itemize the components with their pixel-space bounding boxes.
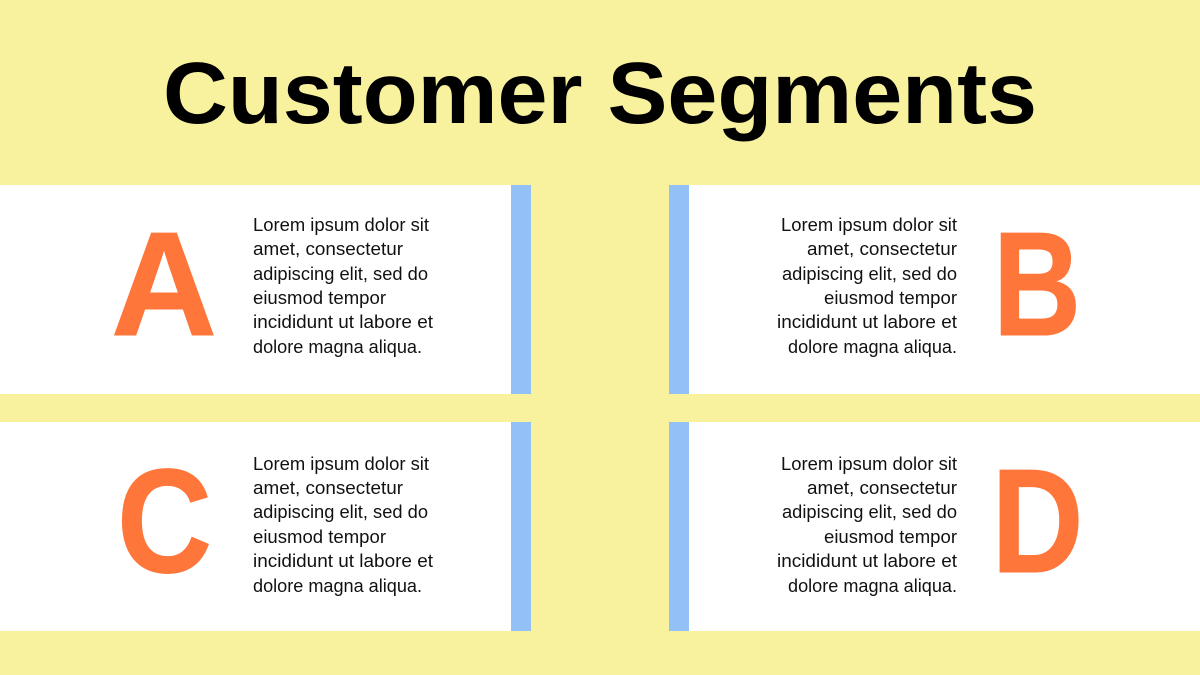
text block B: incididunt ut labore et: [777, 312, 957, 332]
text block D: adipiscing elit, sed do: [782, 502, 957, 522]
letter C: C: [117, 439, 212, 604]
letter B: B: [993, 202, 1081, 367]
text block D: amet, consectetur: [807, 478, 957, 498]
text block D: Lorem ipsum dolor sit: [781, 454, 957, 474]
text block D: eiusmod tempor: [824, 527, 957, 547]
text block D: incididunt ut labore et: [777, 551, 957, 571]
text block C: dolore magna aliqua.: [253, 576, 422, 596]
title: Customer Segments: [163, 45, 1037, 142]
text block B: [777, 215, 957, 357]
text block B: eiusmod tempor: [824, 288, 957, 308]
text block A: dolore magna aliqua.: [253, 337, 422, 357]
text block B: Lorem ipsum dolor sit: [781, 215, 957, 235]
panel: segment B: [669, 185, 1200, 394]
text block C: adipiscing elit, sed do: [253, 502, 428, 522]
text block D: dolore magna aliqua.: [788, 576, 957, 596]
letter D: D: [992, 439, 1084, 604]
text block A: eiusmod tempor: [253, 288, 386, 308]
text block B: amet, consectetur: [807, 239, 957, 259]
text block C: incididunt ut labore et: [253, 551, 433, 571]
text block A: incididunt ut labore et: [253, 312, 433, 332]
text block A: amet, consectetur: [253, 239, 403, 259]
panel: segment C: [0, 422, 531, 631]
letter A: A: [111, 202, 217, 367]
text block C: Lorem ipsum dolor sit: [253, 454, 429, 474]
text block A: [253, 215, 433, 357]
text block B: dolore magna aliqua.: [788, 337, 957, 357]
panel: segment D: [669, 422, 1200, 631]
text block C: eiusmod tempor: [253, 527, 386, 547]
text block C: amet, consectetur: [253, 478, 403, 498]
text block D: [777, 454, 957, 596]
panel: segment A: [0, 185, 531, 394]
text block A: Lorem ipsum dolor sit: [253, 215, 429, 235]
text block B: adipiscing elit, sed do: [782, 264, 957, 284]
text block A: adipiscing elit, sed do: [253, 264, 428, 284]
text block C: [253, 454, 433, 596]
